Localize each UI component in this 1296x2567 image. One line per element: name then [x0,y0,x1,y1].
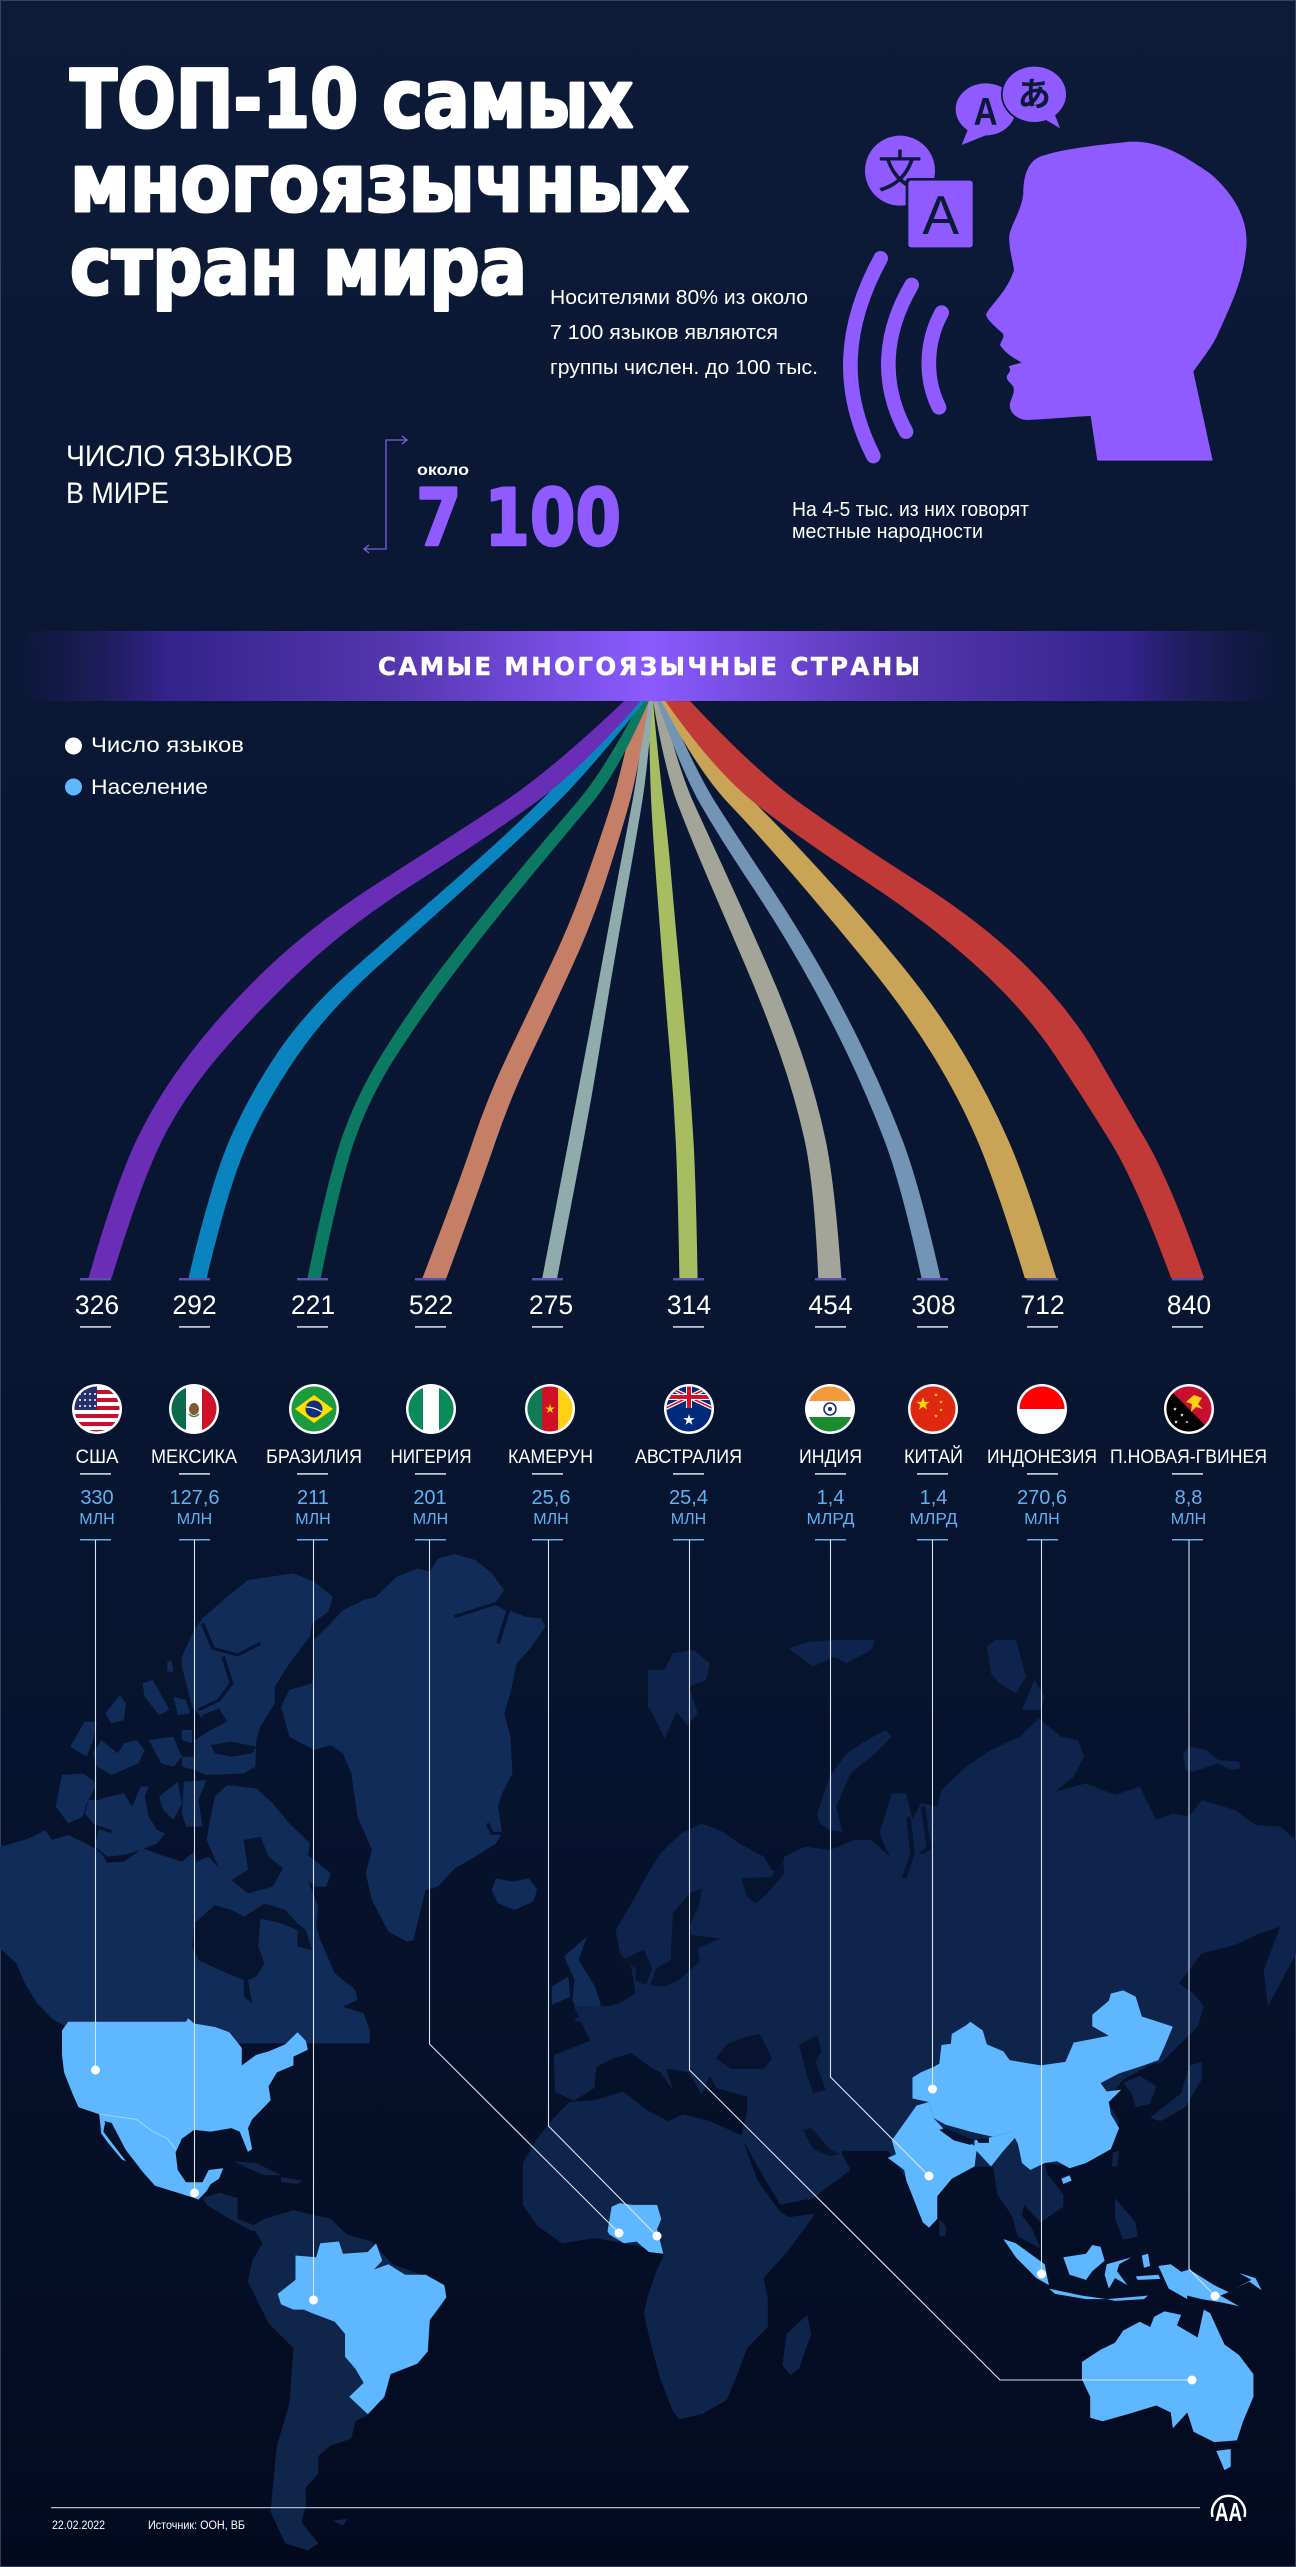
text: local peoples note [792,499,1029,543]
language counts: 221 [291,1290,335,1320]
map: USA and Mexico [62,2018,308,2200]
ribbon: USA [88,701,641,1278]
population values: 1,4 [817,1487,844,1509]
ribbon: Brazil [307,701,649,1278]
flag: USA [72,1384,122,1434]
ribbon chart: languages per country [88,701,1204,1278]
population values: 8,8 [1175,1487,1202,1509]
map: Nigeria and Cameroon [608,2203,663,2254]
population values: МЛРД [910,1511,958,1528]
icon: speaking head with language bubbles [850,65,1247,461]
language counts: 292 [172,1290,217,1320]
country names: БРАЗИЛИЯ [266,1447,362,1468]
text: local peoples note: местные народности [792,521,983,543]
flag: Mexico [169,1384,219,1434]
country names: МЕКСИКА [151,1447,237,1468]
icon: hiragana speech bubble: あ [1018,77,1051,114]
ribbon: Nigeria [422,701,649,1278]
population values: 201 [413,1487,447,1509]
text: speakers note: 7 100 языков являются [550,322,778,344]
population values: 25,6 [532,1487,570,1509]
ribbon: Australia [649,701,698,1278]
title [70,53,689,313]
language counts: 308 [911,1290,956,1320]
language counts: 712 [1020,1290,1065,1320]
footer: date and source: 22.02.2022 [52,2520,105,2532]
logo: AA: AA [1215,2497,1242,2527]
icon: A speech bubble: A [974,90,998,134]
population values: МЛН [533,1511,569,1528]
population values: 25,4 [669,1487,708,1509]
text: speakers note [550,287,818,379]
population values: МЛРД [806,1511,855,1528]
country names: П.НОВАЯ-ГВИНЕЯ [1110,1447,1267,1468]
divider ticks [80,1326,1203,1475]
icon: hiragana speech bubble [1001,65,1068,128]
language counts: 326 [75,1290,119,1320]
text: speakers note: группы числен. до 100 тыс. [550,357,818,379]
ribbon: Cameroon [542,701,653,1278]
population values: 330 [80,1487,114,1509]
ribbon: Papua New Guinea [665,701,1204,1278]
language counts: 840 [1167,1290,1211,1320]
ribbon: Mexico [188,701,645,1278]
population values: МЛН [177,1511,212,1528]
band: section heading: САМЫЕ МНОГОЯЗЫЧНЫЕ СТРАНЫ [378,652,920,681]
population values: 270,6 [1017,1487,1067,1509]
map: Brazil [278,2242,446,2414]
population values: 127,6 [169,1487,220,1509]
language counts [75,1290,1211,1320]
country names: КИТАЙ [904,1446,963,1468]
title: ТОП-10 самых [70,53,633,146]
country names [76,1446,1267,1468]
ribbon: India [653,701,841,1278]
text: number of languages label [66,440,293,510]
legend: number of languages: Число языков [91,734,244,757]
text: local peoples note: На 4-5 тыс. из них говорят [792,499,1029,521]
flag: Cameroon [525,1384,575,1434]
map: India and China [888,1990,1173,2228]
big number: about 7100: около [417,462,469,479]
language counts: 314 [667,1290,711,1320]
population values: МЛН [1024,1511,1060,1528]
text: number of languages label: ЧИСЛО ЯЗЫКОВ [66,440,293,473]
text: speakers note: Носителями 80% из около [550,287,808,309]
flag: India [805,1384,855,1434]
flag: Indonesia [1017,1384,1067,1434]
band: section heading [15,631,1281,701]
icon: sound waves [850,258,942,456]
ribbon base ticks [80,1278,1203,1280]
title: многоязычных [70,137,689,230]
icon: translate symbols: A [922,184,959,246]
country names: ИНДОНЕЗИЯ [987,1447,1097,1468]
big number: about 7100: 7 100 [416,474,621,564]
legend [65,734,244,799]
language counts: 275 [529,1290,573,1320]
map marker dots [91,2066,1220,2384]
population values: МЛН [79,1511,115,1528]
footer: date and source [52,2520,245,2532]
icon: translate symbols: 文 [878,146,922,197]
icon: head silhouette [986,142,1247,461]
bracket arrow [364,436,407,553]
population values: 1,4 [920,1487,947,1509]
flag: China [908,1384,958,1434]
flag: Australia [664,1384,714,1434]
country names: США [76,1447,119,1468]
text: number of languages label: В МИРЕ [66,477,169,510]
footer line [51,2507,1200,2508]
legend: population: Население [91,776,208,799]
population values: 211 [297,1487,329,1509]
ribbon: Indonesia [661,701,1056,1278]
country names: АВСТРАЛИЯ [635,1447,742,1468]
flag: Papua New Guinea [1164,1384,1214,1434]
map: highlighted countries [62,1990,1262,2470]
ribbon: China [657,701,941,1278]
population values: МЛН [1171,1511,1206,1528]
map: Indonesia and Papua New Guinea [1003,2239,1262,2306]
language counts: 454 [808,1290,853,1320]
country names: ИНДИЯ [799,1447,862,1468]
footer: date and source: Источник: ООН, ВБ [148,2520,245,2532]
flag: Nigeria [406,1384,456,1434]
country names: НИГЕРИЯ [390,1447,472,1468]
icon: A speech bubble [956,83,1016,145]
population values: МЛН [413,1511,448,1528]
population values: МЛН [295,1511,331,1528]
language counts: 522 [409,1290,453,1320]
title: стран мира [70,220,527,313]
icon: translate symbols [865,136,975,250]
country names: КАМЕРУН [508,1447,593,1468]
world map [0,1554,1296,2550]
population values [79,1487,1206,1528]
population values: МЛН [671,1511,706,1528]
leader lines to map points [80,1539,1215,2380]
map: background land [0,1554,1296,2550]
map: Australia [1082,2310,1253,2470]
flags row [72,1384,1214,1434]
flag: Brazil [289,1384,339,1434]
